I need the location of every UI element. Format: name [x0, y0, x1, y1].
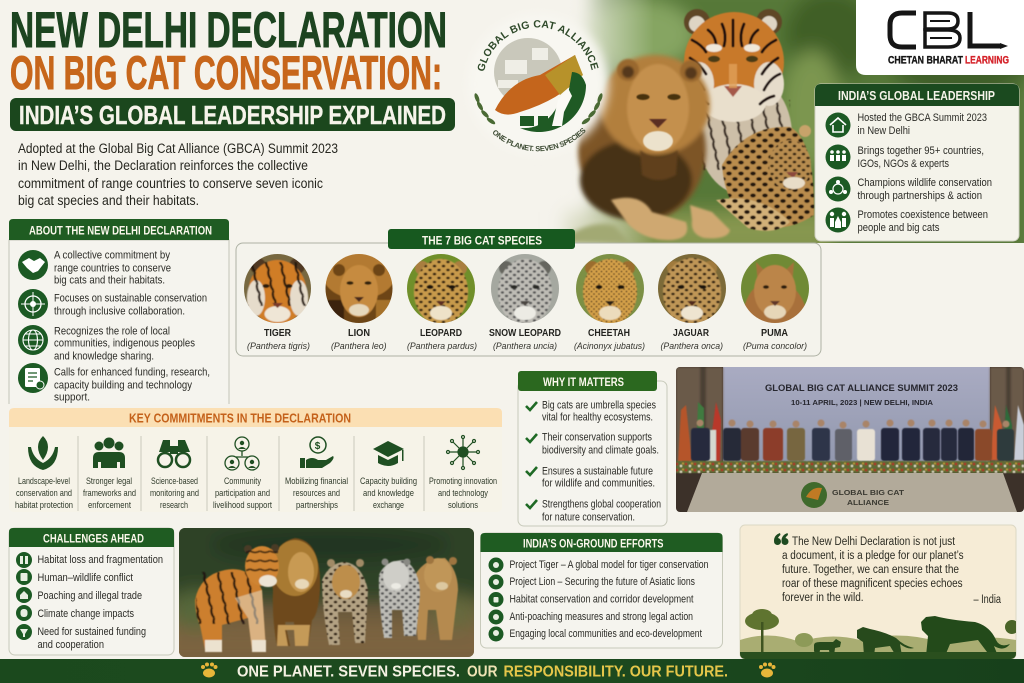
commitment 6: capacity building: Capacity building	[360, 476, 417, 487]
tiger	[195, 544, 279, 652]
icon: document check	[18, 363, 48, 393]
green crescent with deer	[520, 72, 586, 132]
commitment 5: financial resources	[285, 437, 348, 511]
about text: Recognizes the role of local	[54, 326, 170, 338]
why text: Big cats are umbrella species	[542, 400, 656, 412]
icon: partnership	[826, 176, 850, 202]
podium text: ALLIANCE	[847, 498, 889, 507]
challenges text: Human–wildlife conflict	[38, 572, 133, 584]
challenges text: and cooperation	[38, 639, 104, 651]
species: puma: (Puma concolor)	[743, 341, 807, 352]
about text: communities, indigenous peoples	[54, 338, 195, 350]
snow leopard	[379, 558, 420, 638]
summit title: GLOBAL BIG CAT ALLIANCE SUMMIT 2023	[765, 383, 958, 394]
leadership text: Champions wildlife conservation	[858, 177, 992, 189]
about text: A collective commitment by	[54, 250, 170, 262]
species: cheetah: CHEETAH	[588, 327, 630, 339]
efforts text: Project Tiger – A global model for tiger conservation	[510, 559, 708, 571]
species: jaguar: (Panthera onca)	[660, 341, 723, 352]
icons: challenge bullets	[16, 552, 32, 640]
laurels	[473, 93, 604, 126]
puma	[415, 556, 458, 640]
panel: key commitments	[9, 408, 502, 512]
panel: the 7 big cat species	[236, 229, 821, 356]
icon: coin over hand: $	[315, 441, 321, 452]
quote text: a document, it is a pledge for our planet’s	[782, 550, 964, 562]
species: puma: PUMA	[761, 327, 788, 339]
cub	[814, 639, 841, 652]
letter L as pencil	[970, 12, 1000, 46]
species: puma	[740, 253, 812, 352]
icon: left paw	[201, 662, 218, 678]
leadership header	[815, 84, 1019, 106]
commitment 1: landscape conservation: Landscape-level	[18, 476, 70, 487]
photo: five big cats	[179, 528, 474, 657]
icon: target	[18, 289, 48, 319]
about text: support.	[54, 392, 90, 404]
commitment 6: capacity building: and knowledge	[363, 488, 414, 499]
commitment 2: legal frameworks: enforcement	[88, 500, 131, 511]
quote text: forever in the wild.	[782, 592, 864, 604]
icon: right paw	[759, 662, 776, 678]
icon: people group	[826, 144, 850, 170]
intro paragraph	[18, 141, 338, 208]
commitment 3: monitoring: monitoring and	[150, 488, 199, 499]
flags	[678, 402, 1024, 462]
lion shape	[495, 55, 582, 115]
delegates	[691, 420, 1014, 461]
leadership text: Hosted the GBCA Summit 2023	[858, 112, 987, 124]
commitment 3: monitoring: research	[160, 500, 188, 511]
why text	[542, 400, 661, 524]
challenges text	[38, 554, 163, 651]
grass	[574, 222, 626, 242]
letter C	[890, 13, 916, 47]
podium logo	[801, 482, 827, 508]
emblem: Global Big Cat Alliance logo	[474, 20, 616, 152]
quote text	[782, 536, 964, 604]
icon: graduation cap	[373, 441, 404, 466]
logo wordmark: CHETAN BHARAT	[888, 54, 963, 66]
species: cheetah	[574, 253, 647, 352]
species: leopard	[406, 253, 478, 352]
lion	[271, 538, 320, 646]
about text	[54, 250, 210, 404]
intro paragraph: commitment of range countries to conserve seven iconic	[18, 176, 323, 191]
species: snow leopard: (Panthera uncia)	[493, 341, 557, 352]
why text: for nature conservation.	[542, 512, 635, 524]
about text: capacity building and technology	[54, 380, 192, 392]
summit photo	[676, 367, 1024, 512]
icon: coexistence	[826, 208, 850, 232]
efforts text	[510, 559, 708, 640]
commitment 4: community: Community	[224, 476, 261, 487]
why text: biodiversity and climate goals.	[542, 444, 659, 456]
efforts text: Engaging local communities and eco-development	[510, 628, 702, 640]
challenges text: Poaching and illegal trade	[38, 590, 142, 602]
commitment 7: innovation: Promoting innovation	[429, 476, 497, 487]
forest backdrop	[560, 0, 1024, 260]
species: snow leopard	[489, 253, 562, 352]
challenges header: CHALLENGES AHEAD	[43, 532, 144, 546]
icon: summit building	[826, 112, 850, 138]
about text: range countries to conserve	[54, 262, 171, 274]
quote text: roar of these magnificent species echoes	[782, 578, 963, 590]
title	[10, 2, 455, 131]
footer banner	[0, 659, 1024, 683]
podium text: GLOBAL BIG CAT	[832, 488, 904, 497]
footer slogan: OUR	[467, 664, 498, 680]
challenges text: Need for sustained funding	[38, 626, 146, 638]
leopard	[322, 559, 368, 645]
about text: through inclusive collaboration.	[54, 306, 185, 318]
leadership text: in New Delhi	[858, 125, 910, 137]
intro paragraph: big cat species and their habitats.	[18, 193, 199, 208]
icon: quote mark	[774, 533, 788, 545]
leadership header: INDIA’S GLOBAL LEADERSHIP	[838, 89, 995, 103]
species: jaguar: JAGUAR	[673, 327, 709, 339]
icons: effort bullets	[488, 558, 504, 642]
commitment 4: community	[213, 437, 272, 511]
why text: Ensures a sustainable future	[542, 466, 653, 478]
about text: and knowledge sharing.	[54, 350, 154, 362]
commitment 2: legal frameworks: Stronger legal	[86, 476, 132, 487]
species header	[388, 229, 575, 249]
commitment 4: community: participation and	[215, 488, 270, 499]
commitment 7: innovation	[429, 436, 497, 511]
panel: India's on-ground efforts	[480, 533, 722, 648]
commitment 1: landscape conservation	[15, 436, 73, 511]
footer slogan: ONE PLANET. SEVEN SPECIES.	[237, 664, 460, 680]
about text: big cats and their habitats.	[54, 274, 165, 286]
flower line	[676, 461, 1024, 473]
panel: challenges ahead	[9, 528, 174, 655]
podium text	[832, 490, 904, 505]
intro paragraph: Adopted at the Global Big Cat Alliance (GBCA) Summit 2023	[18, 141, 338, 156]
panel: why it matters	[518, 371, 667, 526]
subtitle banner: INDIA’S GLOBAL LEADERSHIP EXPLAINED	[19, 100, 446, 130]
commitment 7: innovation: and technology	[438, 488, 488, 499]
tree	[745, 609, 779, 652]
globe	[494, 38, 562, 106]
species: lion: (Panthera leo)	[331, 341, 386, 352]
fade to page	[546, 0, 649, 242]
intro paragraph: in New Delhi, the Declaration reinforces the collective	[18, 158, 308, 173]
leadership text: Promotes coexistence between	[858, 209, 988, 221]
leadership text: IGOs, NGOs & experts	[858, 158, 949, 170]
leadership text: through partnerships & action	[858, 190, 982, 202]
icon: leaf in hands	[28, 436, 58, 470]
panel: about the New Delhi Declaration	[9, 219, 229, 404]
icon: check marks	[526, 402, 537, 508]
forest and ground	[179, 528, 474, 657]
commitments header: KEY COMMITMENTS IN THE DECLARATION	[129, 412, 351, 426]
commitment 5: financial resources: Mobilizing financial	[285, 476, 348, 487]
species: snow leopard: SNOW LEOPARD	[489, 327, 561, 339]
species: lion: LION	[348, 327, 370, 339]
about text: Focuses on sustainable conservation	[54, 292, 207, 304]
quote attribution: – India	[974, 594, 1001, 606]
efforts text: Habitat conservation and corridor development	[510, 594, 694, 606]
why text: for wildlife and communities.	[542, 478, 655, 490]
curtains	[676, 367, 1024, 462]
commitment 6: capacity building: exchange	[373, 500, 404, 511]
species: leopard: LEOPARD	[420, 327, 462, 339]
commitment 1: landscape conservation: habitat protection	[15, 500, 73, 511]
species: cheetah: (Acinonyx jubatus)	[574, 341, 645, 352]
footer slogan: RESPONSIBILITY. OUR FUTURE.	[504, 664, 728, 680]
commitment 3: monitoring: Science-based	[151, 476, 198, 487]
hero photo: lion, tiger and jaguar	[558, 0, 1024, 243]
challenges text: Climate change impacts	[38, 608, 134, 620]
jaguar	[716, 125, 814, 231]
species: jaguar	[657, 253, 729, 352]
why text: Their conservation supports	[542, 432, 652, 444]
efforts text: Project Lion – Securing the future of Asiatic lions	[510, 576, 695, 588]
quote text: future. Together, we can ensure that the	[782, 564, 959, 576]
icon: globe	[18, 325, 48, 355]
commitment 2: legal frameworks: frameworks and	[83, 488, 136, 499]
panel: India's global leadership	[815, 84, 1019, 241]
leadership text: people and big cats	[858, 222, 940, 234]
far trees	[795, 633, 813, 647]
species: tiger: TIGER	[264, 327, 291, 339]
commitment 3: monitoring	[150, 440, 199, 511]
title line 2: ON BIG CAT CONSERVATION:	[10, 46, 442, 99]
silhouette landscape	[740, 609, 1019, 659]
leadership text: Brings together 95+ countries,	[858, 145, 984, 157]
commitment 7: innovation: solutions	[448, 500, 478, 511]
about header: ABOUT THE NEW DELHI DECLARATION	[29, 224, 212, 238]
leadership text	[858, 112, 992, 234]
challenges text: Habitat loss and fragmentation	[38, 554, 163, 566]
podium	[687, 473, 1017, 512]
emblem ring text	[484, 27, 592, 72]
letter B as books	[925, 13, 960, 47]
second cat	[857, 627, 914, 652]
efforts header: INDIA’S ON-GROUND EFFORTS	[523, 536, 664, 550]
why header: WHY IT MATTERS	[543, 375, 624, 389]
icon: binoculars	[158, 440, 190, 467]
stage backdrop	[723, 367, 990, 462]
challenges header	[9, 528, 174, 547]
why text: vital for healthy ecosystems.	[542, 412, 653, 424]
commitment 6: capacity building	[360, 441, 417, 511]
quote text: The New Delhi Declaration is not just	[792, 536, 956, 548]
why header	[518, 371, 657, 391]
panel: quote	[740, 525, 1019, 659]
icon: handshake	[18, 250, 48, 280]
commitment 5: financial resources: partnerships	[296, 500, 338, 511]
commitment 4: community: livelihood support	[213, 500, 272, 511]
efforts header	[480, 533, 722, 552]
why text: Strengthens global cooperation	[542, 498, 661, 510]
icon: people	[93, 438, 125, 468]
title line 1: NEW DELHI DECLARATION	[10, 2, 447, 58]
species: tiger	[243, 253, 313, 352]
efforts text: Anti-poaching measures and strong legal action	[510, 611, 693, 623]
species: leopard: (Panthera pardus)	[407, 341, 477, 352]
commitment 1: landscape conservation: conservation and	[16, 488, 72, 499]
about text: Calls for enhanced funding, research,	[54, 366, 210, 378]
CBL logo	[856, 0, 1024, 75]
commitments header	[9, 408, 502, 427]
commitment 2: legal frameworks	[83, 438, 136, 511]
about header	[9, 219, 229, 240]
lion	[578, 55, 730, 240]
emblem: Global Big Cat Alliance logo: GLOBAL BIG CAT ALLIANCE	[478, 20, 599, 71]
species header: THE 7 BIG CAT SPECIES	[422, 234, 542, 248]
species: tiger: (Panthera tigris)	[247, 341, 310, 352]
CBL logo: LEARNING	[965, 54, 1009, 66]
icon: circuit burst	[446, 436, 480, 470]
species: lion	[326, 254, 392, 351]
summit date: 10-11 APRIL, 2023 | NEW DELHI, INDIA	[791, 398, 934, 407]
large tiger	[921, 616, 1010, 652]
commitment 5: financial resources: resources and	[293, 488, 340, 499]
footer slogan	[237, 664, 728, 680]
tiger	[684, 9, 792, 195]
icon: network of people	[225, 437, 259, 470]
